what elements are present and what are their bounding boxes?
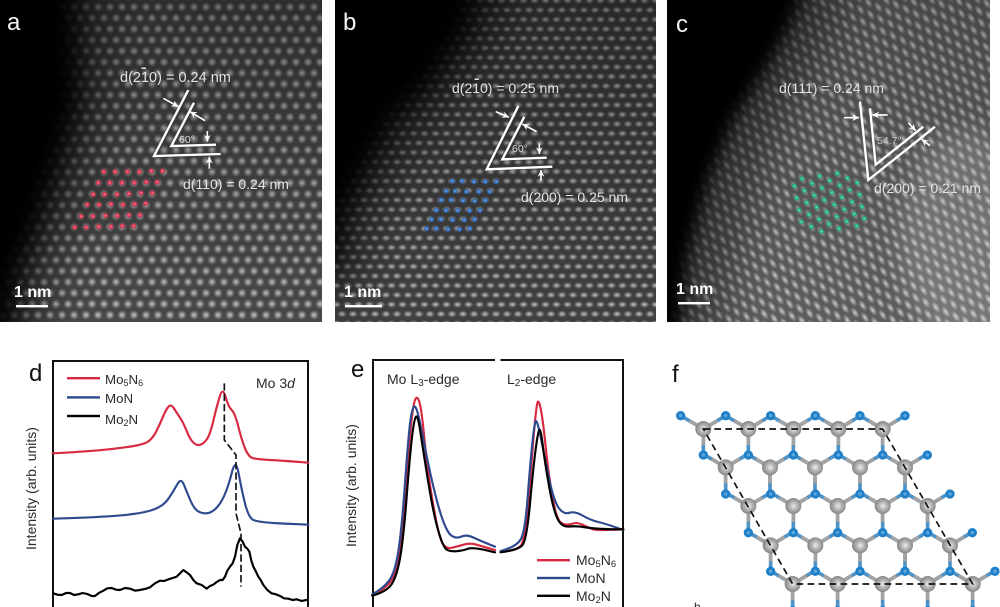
edge label L3: Mo L	[387, 371, 418, 387]
Mo2N curves e	[372, 416, 623, 596]
panel d: Mo 3d spectra	[23, 360, 308, 607]
scale bar c: 1 nm	[676, 281, 713, 298]
legend e: Mo	[576, 552, 595, 568]
panel letter c: c	[676, 11, 688, 38]
lattice fringe annotation b	[487, 106, 552, 181]
lattice fringe annotation c	[844, 102, 935, 180]
Mo2N curve d	[53, 538, 307, 601]
MoN curve d	[53, 465, 308, 525]
scale bar c	[677, 283, 712, 304]
legend e: N	[601, 588, 611, 604]
lattice image c	[667, 0, 990, 322]
legend d: N	[128, 372, 138, 387]
angle label b: 60°	[512, 143, 528, 155]
spacing label d(-210) b: d(210) = 0.25 nm	[452, 80, 559, 96]
edge label L3: -edge	[424, 371, 460, 387]
unit cell dashed outline	[703, 429, 973, 584]
atomic structure model	[676, 411, 1000, 607]
legend e: 5	[595, 559, 601, 570]
legend d: 2	[123, 418, 128, 428]
Mo5N6 curve d	[53, 392, 308, 463]
peak shift dashed guide	[224, 383, 241, 587]
spacing label d(-210) a: d(210) = 0.24 nm	[120, 70, 231, 86]
lattice image a	[0, 0, 322, 322]
spacing label d(111): d(111) = 0.24 nm	[779, 80, 884, 96]
angle label a: 60°	[179, 134, 195, 146]
legend d: N	[128, 412, 138, 427]
scale bar a	[15, 286, 50, 308]
spacing label d(110): d(110) = 0.24 nm	[183, 176, 289, 192]
legend e: N	[601, 552, 611, 568]
spacing label d(200) c: d(200) = 0.21 nm	[874, 180, 981, 196]
panel a: STEM image of Mo5N6	[0, 0, 322, 322]
red atom overlay	[72, 168, 165, 230]
panel b: STEM image of MoN	[300, 0, 656, 322]
lattice fringe annotation a	[154, 90, 221, 169]
legend d	[67, 372, 143, 428]
y axis label e: Intensity (arb. units)	[343, 424, 359, 547]
scale bar a: 1 nm	[14, 284, 51, 301]
edge label L2: L	[507, 371, 515, 387]
edge label L2: -edge	[520, 371, 556, 387]
Mo5N6 curves e	[372, 398, 623, 595]
core level label: Mo 3d	[256, 375, 296, 391]
spectra curves d	[53, 383, 308, 601]
panel c: STEM image of Mo2N	[667, 0, 990, 322]
scale bar b	[345, 286, 382, 308]
panel letter b: b	[343, 9, 356, 36]
molybdenum atoms and bonds	[681, 416, 995, 607]
plot frame d	[53, 361, 308, 607]
blue atom overlay	[424, 178, 499, 232]
edge label L3: 3	[418, 378, 424, 389]
panel letter e: e	[351, 356, 364, 383]
legend e: 2	[595, 595, 601, 606]
green atom overlay	[792, 171, 867, 234]
legend d: 5	[123, 378, 128, 388]
spacing label d(200) b: d(200) = 0.25 nm	[521, 189, 628, 205]
legend e: MoN	[576, 570, 606, 586]
legend e: 6	[611, 559, 616, 570]
lattice image b	[300, 0, 656, 322]
edge label L2: 2	[515, 378, 521, 389]
legend e	[537, 552, 616, 606]
scale bar b: 1 nm	[344, 284, 381, 301]
y axis label d: Intensity (arb. units)	[23, 427, 39, 550]
legend e: Mo	[576, 588, 595, 604]
legend d: Mo	[105, 412, 123, 427]
angle label c: 54.7°	[877, 135, 902, 147]
plot frame e	[373, 360, 623, 607]
panel letter f: f	[672, 361, 679, 388]
legend d: MoN	[105, 391, 133, 406]
panel e: Mo L-edge spectra	[343, 356, 623, 607]
panel letter a: a	[7, 9, 21, 36]
nitrogen atoms	[676, 411, 1000, 607]
panel f: crystal structure	[672, 361, 1000, 607]
panel letter d: d	[29, 360, 42, 387]
legend d: Mo	[105, 372, 123, 387]
legend d: 6	[138, 378, 143, 388]
MoN curves e	[372, 406, 623, 594]
spectra curves e	[372, 398, 623, 596]
